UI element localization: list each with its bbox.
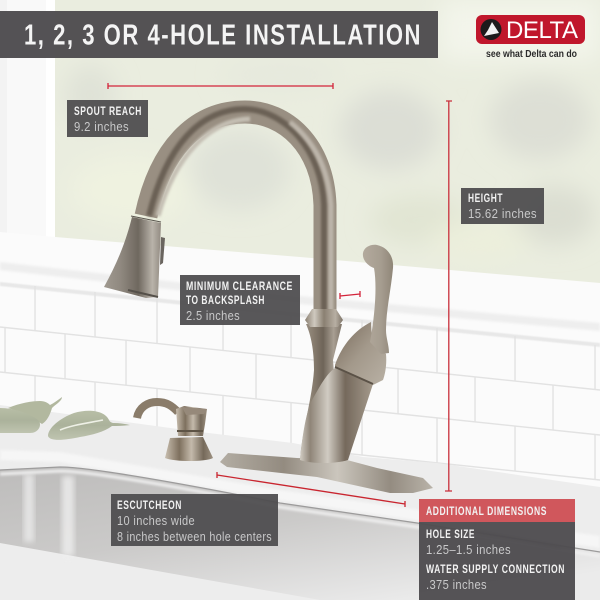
callout: height [461,188,544,224]
icon: faucet [104,109,433,493]
countertop [0,405,600,600]
logo: Delta [476,15,585,60]
faucet spout arc [146,109,331,312]
wall: window sill and tiled backsplash [0,232,600,500]
dimension line: height [445,101,452,491]
handle lever [363,245,393,354]
lower tube [300,368,373,463]
logo: Delta: see what Delta can do [486,49,577,60]
callout: height: 15.62 inches [468,207,537,221]
logo: Delta: DELTA [506,17,578,44]
callout: height: HEIGHT [468,191,503,205]
dimension line: spout reach [108,83,333,89]
callout: minimum clearance to backsplash: MINIMUM CLEARANCE [186,279,293,293]
handle hub [335,322,386,385]
callout: escutcheon: ESCUTCHEON [117,498,182,512]
title banner: 1, 2, 3 OR 4-HOLE INSTALLATION [24,20,422,52]
callout: escutcheon: 10 inches wide [117,514,195,528]
dimension line: clearance to backsplash [340,291,360,299]
callout: escutcheon [111,494,278,546]
icon: soap dispenser [137,402,213,461]
collar [305,309,343,327]
callout: minimum clearance to backsplash: TO BACKSPLASH [186,293,265,307]
panel: additional dimensions: .375 inches [426,578,487,592]
pull-down spray head [104,217,161,298]
panel: additional dimensions: 1.25–1.5 inches [426,543,511,557]
faucet column [300,324,342,460]
callout: spout reach [67,100,148,137]
callout: minimum clearance to backsplash: 2.5 inches [186,309,240,323]
panel: additional dimensions [419,499,575,600]
dimension line: escutcheon width [217,472,405,507]
callout: spout reach: SPOUT REACH [74,104,142,118]
panel: additional dimensions: HOLE SIZE [426,527,475,541]
escutcheon plate [220,453,433,493]
background: blurred window view [0,0,600,300]
title banner [0,11,438,58]
icon: peppers [0,397,130,440]
sink basin [0,467,600,600]
callout: escutcheon: 8 inches between hole centers [117,530,272,544]
callout: spout reach: 9.2 inches [74,120,129,134]
window frame, left side [0,0,55,260]
callout: minimum clearance to backsplash [180,275,300,325]
panel: additional dimensions: ADDITIONAL DIMENSIONS [426,504,547,518]
